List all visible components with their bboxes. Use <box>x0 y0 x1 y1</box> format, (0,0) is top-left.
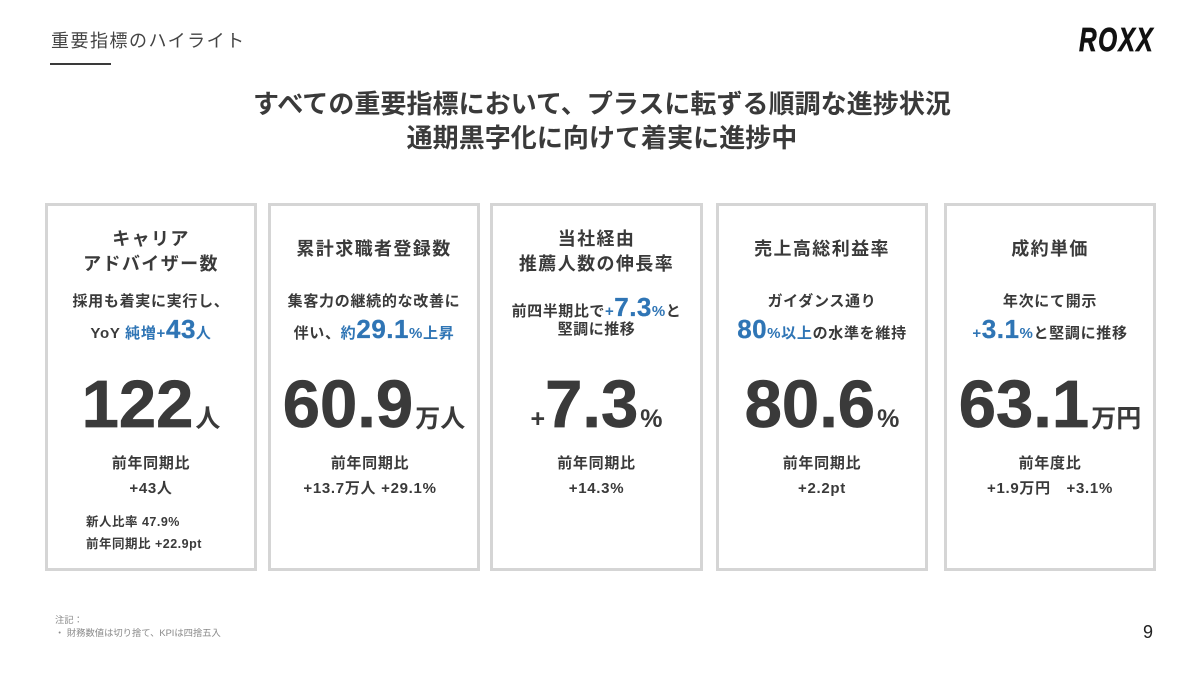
logo: ROXX <box>1079 21 1154 58</box>
year on year comparison <box>557 455 636 497</box>
year on year comparison: +14.3% <box>569 480 624 497</box>
card highlight: +3.1%と堅調に推移 <box>972 314 1128 344</box>
year on year comparison: +1.9万円 +3.1% <box>987 480 1113 497</box>
card heading: 当社経由 <box>558 229 635 249</box>
card description: 採用も着実に実行し、 <box>72 293 230 310</box>
card highlight: 堅調に推移 <box>558 321 635 338</box>
metric value: 80.6% <box>745 367 899 442</box>
metric value: 60.9万人 <box>283 367 465 442</box>
card heading: 累計求職者登録数 <box>296 239 452 259</box>
panel: gross margin <box>716 203 928 571</box>
card heading: 推薦人数の伸長率 <box>519 254 674 274</box>
title: すべての重要指標において、プラスに転ずる順調な進捗状況 <box>253 89 951 119</box>
card heading: 売上高総利益率 <box>754 239 890 259</box>
new hire ratio <box>86 515 202 551</box>
card highlight: 伴い、約29.1%上昇 <box>294 314 454 344</box>
card heading <box>519 229 674 274</box>
card highlight: 80%以上の水準を維持 <box>737 314 907 344</box>
card heading: キャリア <box>112 229 190 249</box>
year on year comparison <box>303 455 437 497</box>
footnote: ・ 財務数値は切り捨て、KPIは四捨五入 <box>55 628 221 638</box>
footnote: 注記： <box>55 615 83 625</box>
year on year comparison <box>987 455 1113 497</box>
year on year comparison: +43人 <box>129 480 173 497</box>
year on year comparison: +2.2pt <box>798 480 846 497</box>
card highlight: 前四半期比で+7.3%と <box>512 292 681 322</box>
card heading <box>83 229 219 274</box>
year on year comparison <box>112 455 190 497</box>
card highlight <box>512 292 681 338</box>
panel: registered job seekers <box>268 203 480 571</box>
card description: ガイダンス通り <box>767 293 876 310</box>
title <box>253 89 951 153</box>
year on year comparison: 前年同期比 <box>783 455 861 472</box>
panel: career advisors <box>45 203 257 571</box>
metric value: 63.1万円 <box>959 367 1141 442</box>
title: 通期黒字化に向けて着実に進捗中 <box>407 123 797 153</box>
year on year comparison: +13.7万人 +29.1% <box>303 480 437 497</box>
panel: contract unit price <box>944 203 1156 571</box>
year on year comparison: 前年同期比 <box>331 455 409 472</box>
year on year comparison: 前年度比 <box>1019 455 1081 472</box>
footnote <box>55 615 221 638</box>
year on year comparison <box>783 455 861 497</box>
card heading: アドバイザー数 <box>83 254 219 274</box>
section heading: 重要指標のハイライト <box>51 31 246 51</box>
page number: 9 <box>1143 622 1153 642</box>
panel: referral growth <box>490 203 703 571</box>
heading underline <box>50 63 111 65</box>
card description: 年次にて開示 <box>1003 293 1097 310</box>
year on year comparison: 前年同期比 <box>112 455 190 472</box>
metric value: 122人 <box>82 367 220 442</box>
new hire ratio: 前年同期比 +22.9pt <box>86 537 202 551</box>
card description: 集客力の継続的な改善に <box>288 293 460 310</box>
new hire ratio: 新人比率 47.9% <box>86 515 180 529</box>
year on year comparison: 前年同期比 <box>557 455 636 472</box>
metric value: +7.3% <box>530 367 662 442</box>
card highlight: YoY 純増+43人 <box>90 314 212 344</box>
card heading: 成約単価 <box>1011 239 1089 259</box>
